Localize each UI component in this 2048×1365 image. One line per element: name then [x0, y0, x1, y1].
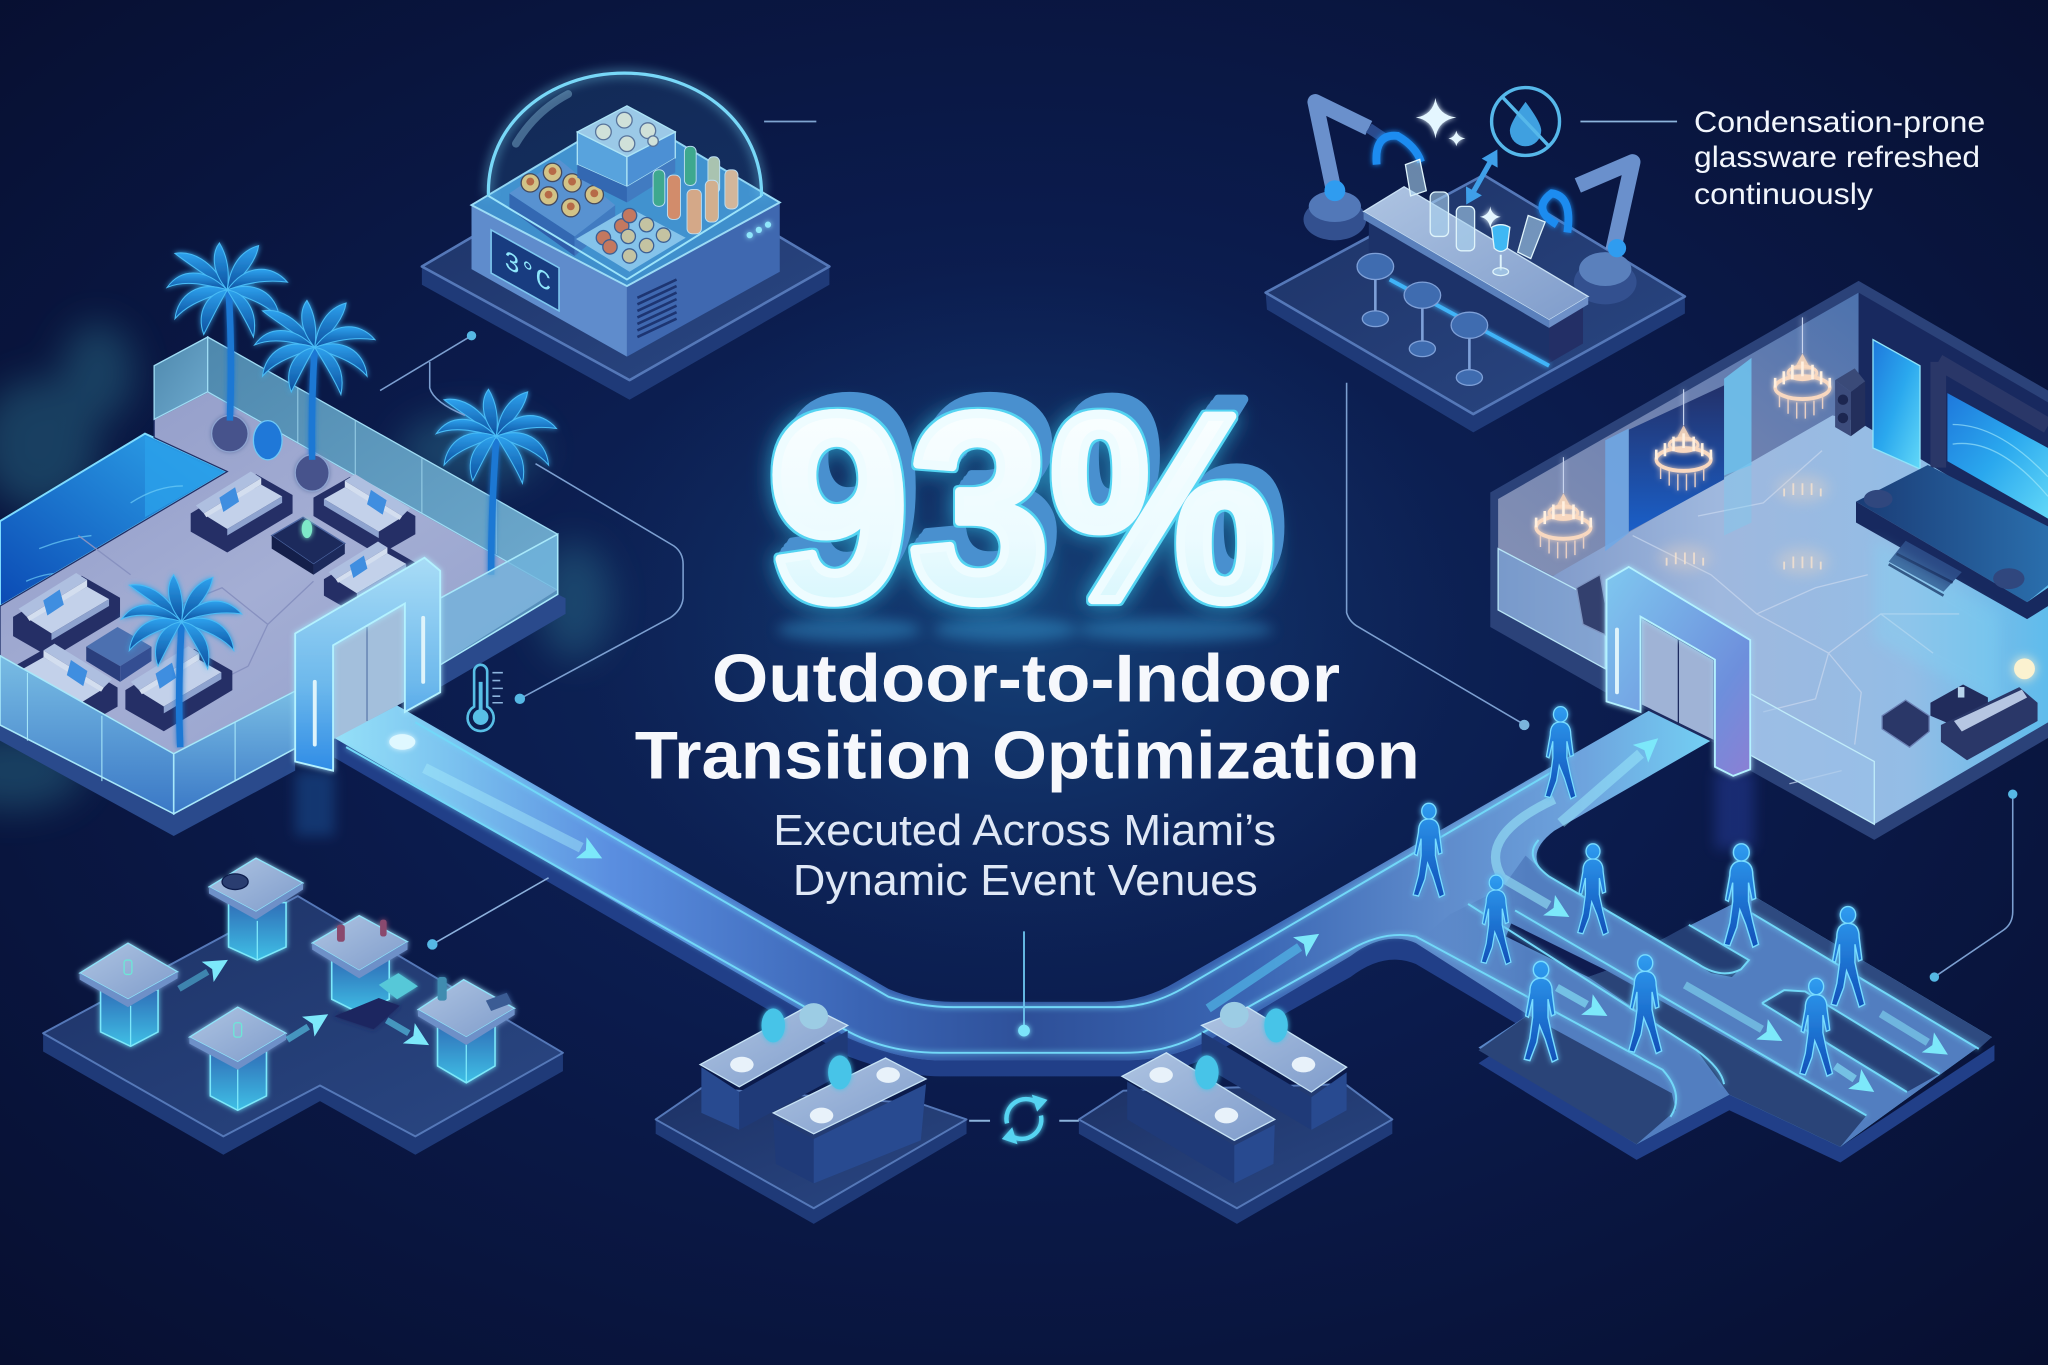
second tray: [576, 208, 686, 272]
connector: center line to hall: [1347, 383, 1529, 730]
panel: glassware bar: [1266, 88, 1985, 432]
title: Outdoor-to-Indoor: [712, 641, 1340, 716]
bar light strip: [1390, 280, 1549, 366]
bar stools: [1357, 253, 1488, 385]
right glass rail: [1750, 694, 1874, 824]
panel: right door arch: [1607, 567, 1750, 776]
headline stat: 93%: [768, 360, 1275, 657]
mist clouds: [0, 323, 611, 810]
arrow: lower lane 1: [1557, 988, 1587, 1004]
people: [1413, 707, 1865, 1076]
plinth 2: [209, 858, 303, 960]
bar platform: [1266, 175, 1685, 432]
sofa back right: [313, 474, 415, 555]
plinth 5: [418, 977, 515, 1083]
callout text: continuously: [1694, 178, 1873, 211]
sparkles: [1416, 98, 1501, 229]
sofa far left: [11, 644, 118, 729]
vent: [637, 280, 677, 337]
table D: [1202, 1002, 1347, 1130]
back glass wall: [154, 337, 558, 590]
table C: [1122, 1053, 1275, 1183]
sync connector left: [969, 1120, 990, 1122]
arrow: lower lane 3: [1835, 1066, 1855, 1079]
panel: dining tables right: [1079, 1002, 1392, 1224]
panel: event hall: [1490, 281, 2048, 840]
fridge body: [472, 112, 780, 357]
guest 9: [1524, 961, 1558, 1062]
front glass panes: [0, 656, 295, 814]
sync connector right: [1059, 1120, 1079, 1122]
icon: thermometer: [468, 665, 503, 731]
side LED screen: [1873, 340, 1920, 469]
glass sushi box: [577, 106, 675, 202]
doorway dark panel: [1629, 385, 1724, 532]
connector: plinth dot: [427, 878, 549, 950]
hall shell: [1490, 281, 2048, 840]
stage light reflection: [1874, 538, 1998, 705]
central glow: [580, 261, 1468, 967]
left glass rail: [1498, 549, 1605, 669]
marble veins: [1633, 451, 1959, 784]
lane pocket: [1762, 990, 1940, 1092]
guest 4: [1578, 844, 1608, 935]
arrow: plinth 4 to 5: [387, 1020, 409, 1033]
door leaves: [1640, 617, 1715, 742]
low table: [86, 627, 152, 682]
callout text: Condensation-prone: [1694, 106, 1985, 139]
lounge chair: [1576, 575, 1605, 635]
palm tree 1: [167, 243, 287, 452]
arch thermometers: [315, 618, 423, 745]
plinth 4 with trolley: [312, 916, 418, 1029]
chandelier reflections: [1659, 475, 1829, 575]
arrow: curved lane: [1496, 799, 1554, 905]
double arrow: [1473, 162, 1490, 192]
plate surface: [1416, 856, 1992, 1147]
subtitle: [773, 807, 1276, 905]
left wall: [1498, 293, 1859, 576]
door leaves: [333, 603, 405, 739]
dark lower bay: [1479, 1015, 1676, 1144]
palm tree 4: [121, 575, 242, 747]
left robot arm: [1304, 102, 1421, 240]
bar counter: [1364, 187, 1588, 363]
plinth 3: [189, 1007, 286, 1110]
chandeliers: [1536, 317, 1830, 558]
lounge set: [1882, 658, 2038, 760]
arch frame: [295, 558, 440, 771]
callout text: glassware refreshed: [1694, 141, 1980, 174]
path base: [334, 738, 1994, 1163]
right glass wall: [440, 534, 558, 665]
stat reflection: [777, 618, 1273, 641]
fridge platform: [422, 146, 829, 400]
arch thermometer: [1615, 630, 1618, 692]
terrace floor: [0, 392, 558, 754]
water jar: [253, 421, 282, 460]
table platform right: [1079, 1084, 1392, 1224]
callout text: [1694, 106, 1985, 211]
connector: fridge to terrace: [380, 331, 683, 704]
glow under right door: [1715, 771, 1754, 849]
arrow: lower lane 4: [1881, 1014, 1928, 1042]
display temperature panel: [491, 230, 559, 311]
marble floor: [1498, 415, 2048, 824]
guest at door: [1545, 707, 1576, 799]
appetizer tray: [509, 159, 615, 256]
terrace base: [0, 594, 566, 836]
dark groove: [1506, 923, 1607, 977]
guest 8: [1629, 955, 1662, 1054]
arrow: to hall door: [1561, 754, 1640, 823]
main stage screen: [1947, 393, 2048, 519]
wall pillars: [1605, 358, 1752, 551]
sofa front: [125, 646, 232, 731]
connector: top short line: [764, 120, 816, 122]
arrow: right walkway: [1208, 947, 1300, 1008]
right margin: [1752, 895, 1992, 1049]
path top surface: [334, 705, 1992, 1147]
floor cracks: [78, 536, 313, 692]
panel: left door arch: [295, 558, 440, 771]
table platform left: [656, 1088, 967, 1224]
plinth platform: [43, 896, 563, 1155]
palm tree 3: [436, 389, 556, 575]
guest 2: [1413, 803, 1445, 897]
sofa back left: [191, 472, 293, 553]
icon: sync arrows: [1002, 1095, 1048, 1144]
table A: [700, 1003, 848, 1130]
stage: [1856, 465, 2048, 619]
guest 6: [1831, 907, 1865, 1007]
panel: guest pathway: [334, 705, 1994, 1163]
dark right wall: [1859, 293, 2048, 536]
panel: dining tables left: [656, 1003, 967, 1224]
guest 3: [1481, 875, 1511, 965]
arrow: lower lane 2: [1685, 985, 1762, 1029]
sofa front left: [13, 573, 120, 658]
speaker: [1835, 368, 1865, 436]
pool: [0, 434, 227, 606]
guest 5: [1724, 844, 1759, 947]
bottles: [653, 146, 738, 234]
panel: cold display: [422, 73, 829, 400]
subtitle: Executed Across Miami’s: [773, 807, 1276, 855]
sofa right: [324, 542, 416, 614]
right robot arm: [1542, 162, 1637, 304]
arrow: plinth 1 to 2: [179, 972, 208, 989]
start marker: [389, 734, 415, 750]
panel: rooftop terrace: [0, 243, 611, 836]
title: Transition Optimization: [635, 719, 1420, 794]
temperature reading: 3°C: [504, 246, 551, 301]
dark centre strip: [1588, 971, 1866, 1147]
lighting truss: [1938, 362, 2048, 468]
walkway glow under door: [295, 771, 334, 836]
icon: no condensation: [1492, 88, 1560, 155]
table B: [773, 1055, 926, 1183]
callout leader: [1580, 120, 1677, 122]
connector: lower right: [1930, 789, 2017, 982]
arrow: left walkway: [424, 768, 581, 848]
stage steps: [1889, 541, 1962, 596]
status lights: [747, 222, 771, 238]
panel: staging plinths: [43, 858, 563, 1155]
arrow: plinth 3 to 4: [287, 1027, 308, 1040]
palm tree 2: [255, 300, 375, 491]
path edge lines: [346, 722, 1979, 1117]
title: [635, 641, 1420, 794]
glass dome: [488, 73, 761, 280]
plinth 1: [80, 943, 178, 1046]
arch frame: [1607, 567, 1750, 776]
guest 7: [1800, 978, 1832, 1076]
coffee table: [272, 517, 345, 575]
connector: walkway dot: [1018, 931, 1030, 1036]
glassware: [1405, 159, 1545, 276]
upper pocket: [1660, 925, 1749, 977]
subtitle: Dynamic Event Venues: [793, 857, 1258, 905]
